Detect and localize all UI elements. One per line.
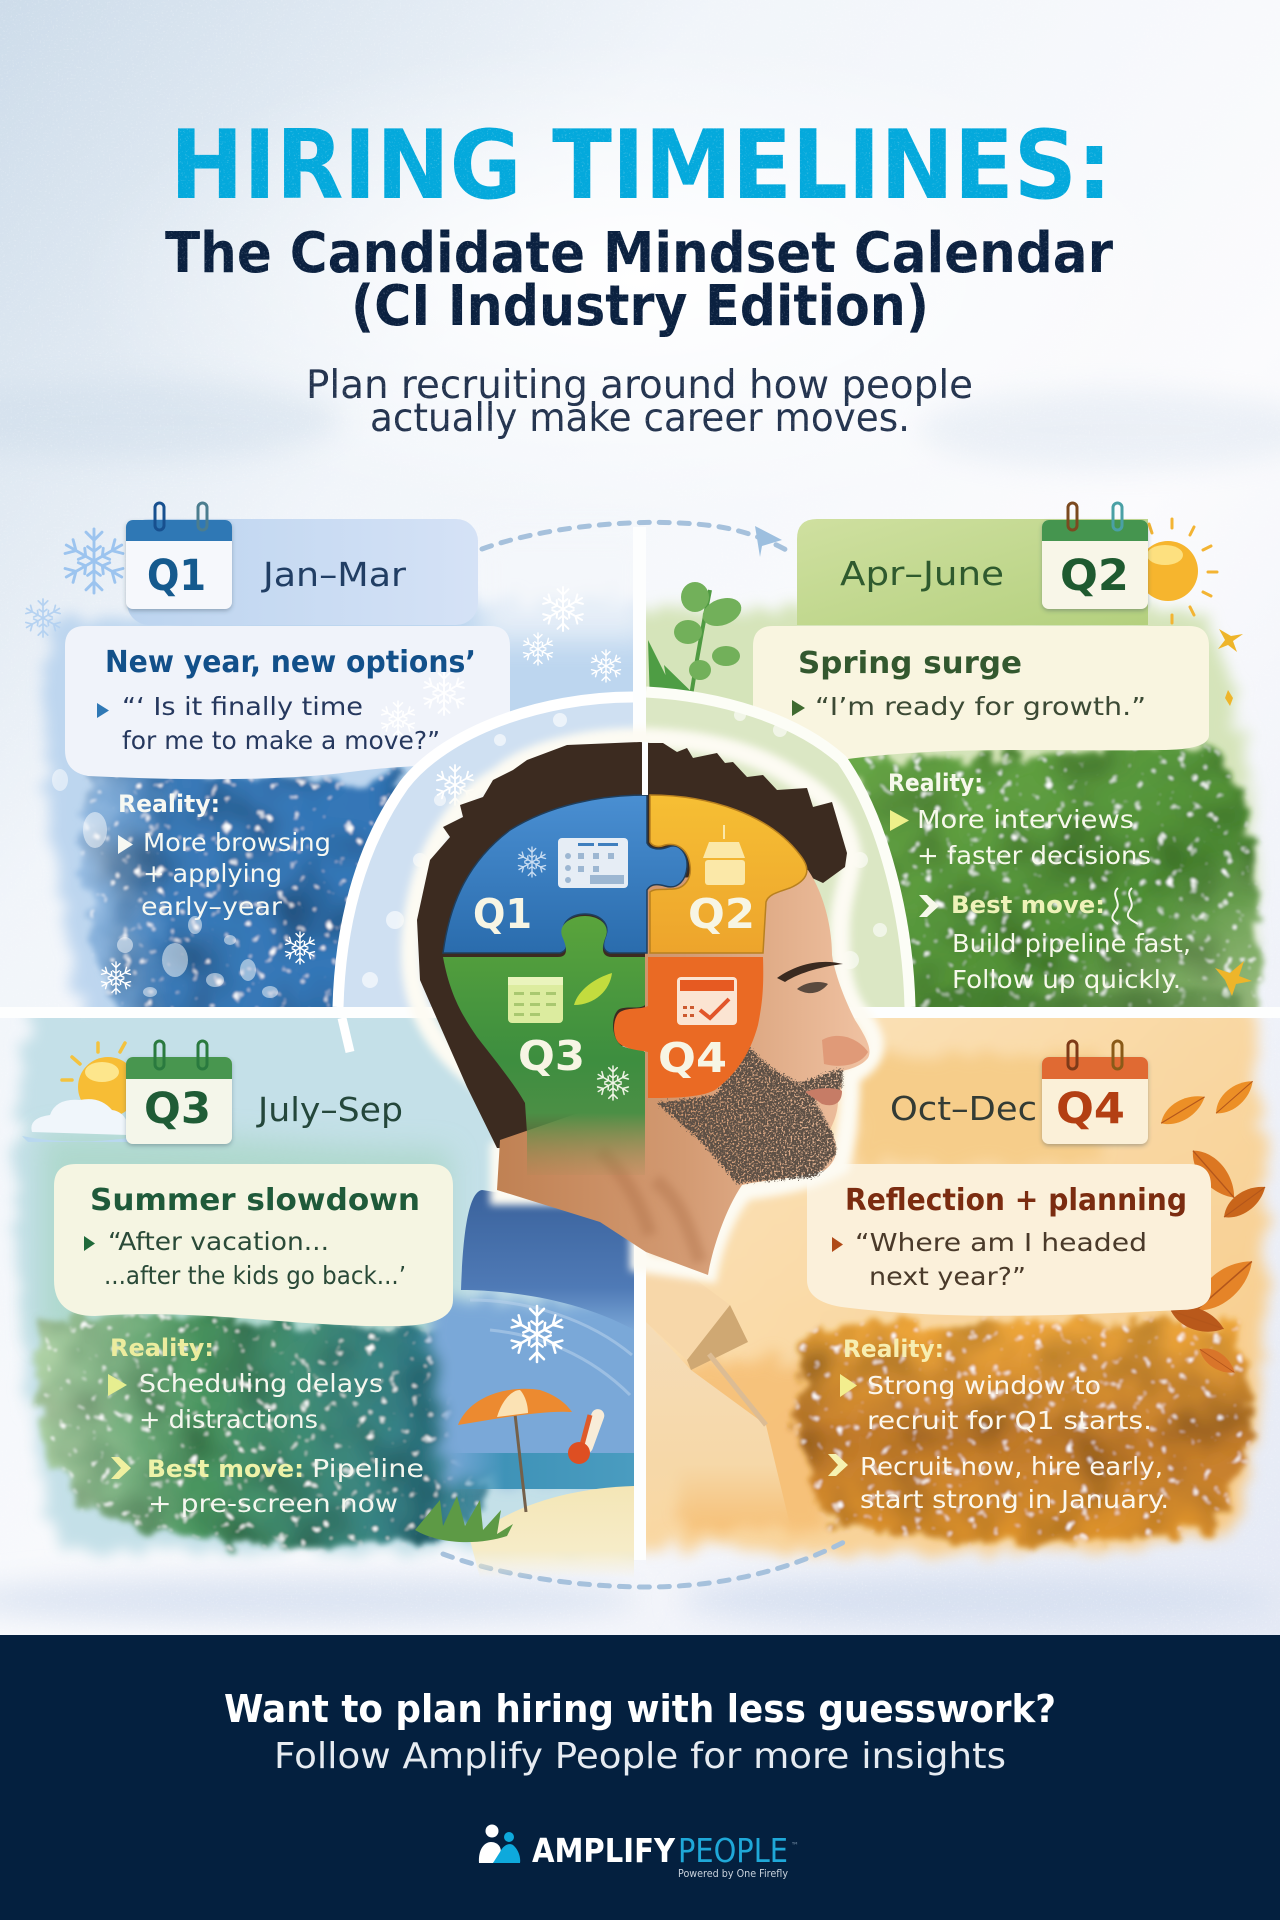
- Q2 callout: Spring surge: [798, 646, 1022, 681]
- face and neck: [497, 870, 869, 1275]
- Q1 reality text: Reality:: [118, 790, 220, 818]
- Q1 header band: [127, 519, 478, 625]
- Q2 date range: Apr–June: [840, 554, 1004, 593]
- icon: beach umbrella: [458, 1389, 572, 1512]
- Q2 reality text: Reality:: [888, 769, 983, 797]
- footer call to action: Want to plan hiring with less guesswork?: [224, 1687, 1056, 1731]
- puzzle piece Q4: Q4: [658, 1034, 727, 1082]
- Q4 callout: Reflection + planning: [845, 1183, 1187, 1218]
- Q3 reality text: Scheduling delays: [139, 1369, 383, 1398]
- quadrant rings: [338, 692, 910, 1052]
- quadrant dividers: [0, 527, 1280, 1560]
- Q4 reality text: recruit for Q1 starts.: [867, 1406, 1152, 1435]
- Q4 reality text: [828, 1335, 1169, 1514]
- icon: calendar in Q2: [703, 825, 745, 885]
- Q4 date range: Oct–Dec: [890, 1089, 1037, 1128]
- Q1 callout: [65, 626, 510, 779]
- lead text: Plan recruiting around how people: [306, 363, 973, 408]
- Q3 reality text: + distractions: [139, 1405, 318, 1434]
- lead text: [306, 363, 973, 441]
- Q3 calendar badge: [126, 1041, 232, 1144]
- icon: people: [479, 1824, 520, 1863]
- Q2 callout: [753, 626, 1209, 760]
- puzzle piece Q3: Q3: [518, 1032, 585, 1080]
- Q3 reality text: Reality:: [110, 1334, 214, 1362]
- Q1 reality text: early–year: [141, 892, 283, 921]
- icon: thermometer: [568, 1407, 606, 1464]
- Q3 callout: “After vacation...: [108, 1227, 329, 1256]
- Q4 callout: [807, 1164, 1211, 1316]
- Q2 calendar badge: Q2: [1060, 551, 1129, 601]
- Q2 reality text: Build pipeline fast,: [952, 929, 1191, 958]
- Q3 callout: Summer slowdown: [90, 1183, 420, 1218]
- beard: [657, 1040, 843, 1183]
- Q4 reality text: start strong in January.: [860, 1485, 1169, 1514]
- icon: sun and cloud: [22, 1043, 138, 1142]
- title: HIRING TIMELINES:: [170, 111, 1112, 221]
- footer follow line: Follow Amplify People for more insights: [274, 1736, 1006, 1777]
- Q3 date range: July–Sep: [256, 1090, 403, 1129]
- Q3 reality text: Best move:: [147, 1455, 304, 1483]
- Q1 calendar badge: Q1: [147, 551, 206, 601]
- puzzle piece Q1: Q1: [473, 890, 532, 938]
- Q4 callout: “Where am I headed: [855, 1228, 1147, 1257]
- icon: plant: [648, 582, 745, 704]
- puzzle piece Q2: [650, 795, 807, 953]
- subtitle: The Candidate Mindset Calendar: [165, 221, 1113, 286]
- Q4 calendar badge: Q4: [1056, 1084, 1125, 1134]
- head halo: [411, 738, 874, 1272]
- Q2 header band: [797, 519, 1148, 625]
- shirt: [430, 1190, 790, 1525]
- arrow: dashed orbit: [443, 522, 846, 1587]
- Q2 reality text: Follow up quickly.: [952, 965, 1181, 994]
- icon: yellow flowers: [1215, 629, 1252, 996]
- puzzle piece Q3: [443, 916, 645, 1175]
- Q4 header band: [848, 1055, 1100, 1164]
- Q1 reality text: More browsing: [143, 828, 331, 857]
- Q2 reality text: Best move:: [951, 891, 1105, 919]
- Q4 calendar badge: [1042, 1041, 1148, 1144]
- icon: calendar in Q3: [508, 977, 563, 1023]
- icon: calendar in Q4: [677, 977, 737, 1025]
- Q1 reality text: + applying: [143, 859, 282, 888]
- subtitle: [165, 221, 1113, 339]
- logo: Amplify People: AMPLIFY: [532, 1831, 676, 1870]
- footer band: [0, 1635, 1280, 1920]
- Q1 reality text: [118, 790, 331, 921]
- Q1 date range: Jan–Mar: [261, 555, 406, 594]
- sea and beach scene: [415, 1389, 634, 1578]
- Q2 reality text: More interviews: [917, 805, 1134, 834]
- Q1 calendar badge: [126, 503, 232, 609]
- icon: snowflakes Q1: [24, 529, 622, 994]
- lead text: actually make career moves.: [370, 396, 910, 441]
- logo: Amplify People: ™: [791, 1841, 799, 1850]
- panel: Q2 Apr-June: [630, 503, 1260, 1040]
- Q1 callout: “‘ Is it finally time: [122, 692, 363, 721]
- hair: [417, 742, 847, 1150]
- Q4 reality text: Reality:: [843, 1335, 944, 1363]
- logo: Amplify People: [479, 1824, 799, 1880]
- Q4 reality text: Recruit now, hire early,: [860, 1452, 1163, 1481]
- head illustration: [411, 738, 874, 1275]
- Q2 calendar badge: [1042, 503, 1148, 609]
- logo: Amplify People: PEOPLE: [678, 1831, 788, 1870]
- panel: Q4 Oct-Dec: [630, 1000, 1271, 1553]
- Q1 callout: New year, new options’: [105, 645, 476, 680]
- Q3 reality text: Pipeline: [312, 1454, 424, 1483]
- logo: Amplify People: Powered by One Firefly: [678, 1867, 788, 1880]
- Q2 reality text: [888, 769, 1191, 994]
- panel: Q3 July-Sep: [17, 1000, 660, 1550]
- icon: calendar in Q1: [558, 838, 628, 888]
- Q3 reality text: + pre-screen now: [148, 1489, 398, 1518]
- Q3 callout: ...after the kids go back...’: [104, 1261, 406, 1290]
- Q3 calendar badge: Q3: [144, 1084, 211, 1134]
- Q4 reality text: Strong window to: [867, 1371, 1101, 1400]
- lips: [805, 1088, 842, 1105]
- Q2 callout: “I’m ready for growth.”: [815, 692, 1146, 721]
- icon: autumn leaves: [1156, 1076, 1271, 1380]
- Q4 callout: next year?”: [869, 1262, 1026, 1291]
- Q1 callout: for me to make a move?”: [122, 726, 440, 755]
- puzzle piece Q2: Q2: [688, 890, 755, 938]
- puzzle piece Q1: [443, 795, 687, 953]
- panel: Q1 Jan-Mar: [24, 503, 660, 1040]
- icon: leaf in Q3: [574, 973, 612, 1005]
- subtitle: (CI Industry Edition): [351, 274, 929, 339]
- Q3 reality text: [108, 1334, 424, 1518]
- icon: sun: [1138, 519, 1217, 623]
- Q2 reality text: + faster decisions: [917, 841, 1151, 870]
- nose: [822, 1036, 868, 1066]
- brow and eye: [777, 962, 843, 993]
- Q3 callout: [54, 1164, 453, 1326]
- puzzle piece Q4: [614, 957, 763, 1098]
